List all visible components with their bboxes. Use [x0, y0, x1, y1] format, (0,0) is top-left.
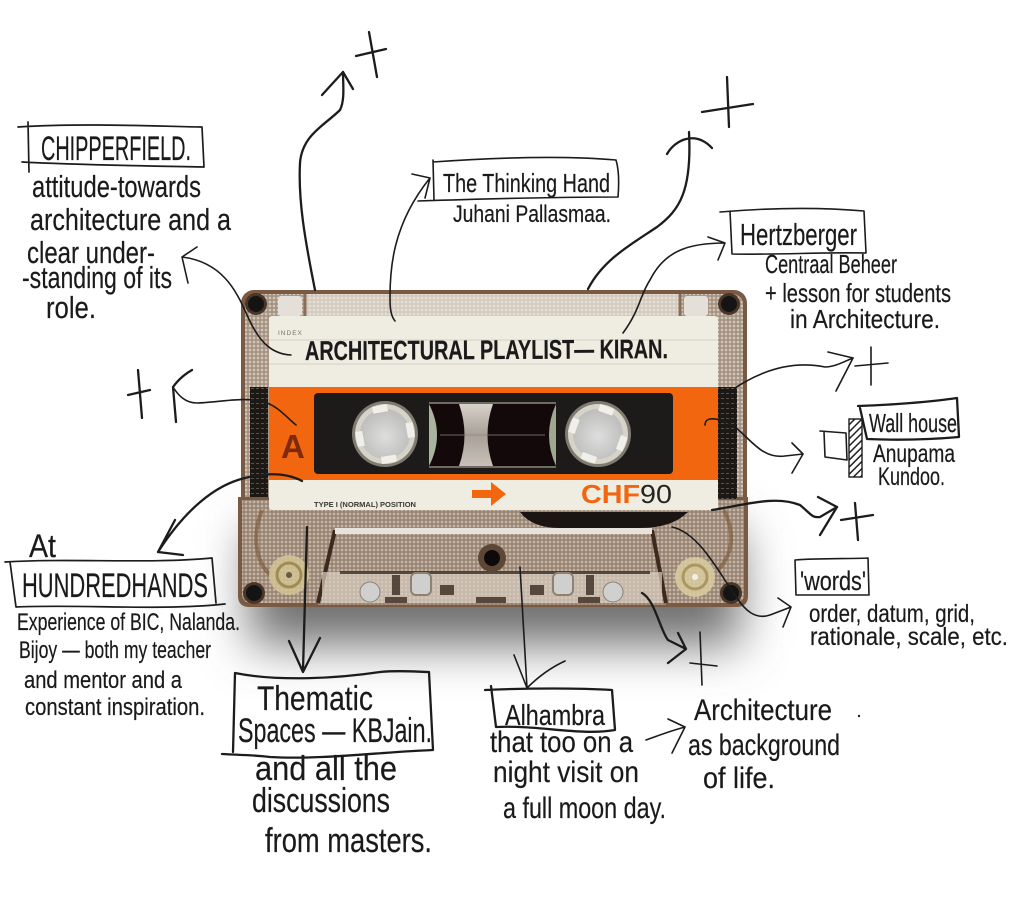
body text: and mentor and a [24, 667, 183, 694]
left reel [352, 401, 418, 467]
body text: role. [46, 290, 96, 325]
index label: INDEX [278, 330, 303, 337]
body text: and all the [255, 750, 397, 788]
note: Wall house [820, 398, 959, 491]
body text: order, datum, grid, [809, 600, 975, 628]
arrow and plus: bottom right [642, 593, 717, 685]
note: Thematic Spaces: Spaces — KBJain. [238, 712, 432, 750]
heading: CHIPPERFIELD. [41, 130, 191, 168]
body text: -standing of its [22, 260, 172, 295]
orange direction arrow [472, 482, 506, 506]
body text: Bijoy — both my teacher [19, 637, 211, 664]
body text: + lesson for students [765, 278, 951, 308]
body text: night visit on [493, 756, 639, 789]
wall section sketch [820, 419, 862, 477]
arrow: to Hundredhands [158, 474, 302, 555]
note: Architecture as background of life: Architecture [694, 694, 832, 727]
arrow: to wall house sketch [705, 419, 803, 473]
lower body section [238, 497, 748, 607]
arrow and plus: top right [588, 77, 753, 289]
CHF90 brand: CHF90 [581, 479, 672, 509]
orange band [269, 387, 718, 480]
arrow: to words [672, 527, 791, 627]
heading box [222, 671, 433, 758]
right dark grip strip [718, 387, 737, 499]
heading box [720, 208, 866, 254]
tape window [314, 393, 673, 474]
right roller [675, 557, 715, 597]
paper label [269, 316, 718, 510]
note: At Hundredhands [5, 528, 240, 721]
heading: Thematic [257, 680, 373, 718]
tape guide holes [360, 573, 623, 602]
note: Architecture as background of life: as background [688, 729, 840, 762]
body text: attitude-towards [32, 169, 201, 204]
heading box [858, 398, 959, 440]
heading: The Thinking Hand [443, 168, 610, 198]
top corner windows [278, 296, 708, 316]
arrow and plus: right lower [712, 497, 873, 540]
arrow: Alhambra to architecture [646, 719, 685, 753]
body text [765, 249, 951, 334]
plus with arrow: left [128, 370, 296, 425]
arrow: label to Hertzberger [623, 237, 725, 333]
arrow: to Alhambra [514, 567, 565, 688]
body text: architecture and a [30, 202, 232, 237]
architect name: Anupama [873, 440, 955, 468]
note: Thematic Spaces [222, 671, 433, 860]
note: Architecture as background of life [688, 694, 840, 795]
architect name: Kundoo. [878, 463, 945, 491]
note: The Thinking Hand [418, 157, 619, 228]
head opening trapezoid [318, 528, 666, 605]
body text: discussions [252, 782, 390, 820]
body text [252, 750, 432, 860]
heading box [5, 558, 225, 607]
body text: Experience of BIC, Nalanda. [17, 609, 240, 636]
arrow: label to Chipperfield [182, 247, 291, 355]
author: Juhani Pallasmaa. [453, 201, 611, 228]
stray dot [858, 715, 860, 717]
note: Alhambra [485, 686, 666, 825]
left roller [269, 555, 309, 595]
note: Architecture as background of life: of life. [703, 762, 775, 795]
note: Hertzberger [720, 208, 951, 334]
heading box [418, 157, 619, 201]
cassette shadow [250, 530, 740, 645]
heading: Hertzberger [740, 217, 857, 252]
heading: HUNDREDHANDS [22, 567, 208, 605]
side letter A: A [281, 428, 305, 465]
dark arc under label [520, 512, 688, 528]
heading: Alhambra [505, 700, 606, 732]
side wear arcs [256, 510, 731, 575]
arrow: label to The Thinking Hand [390, 174, 430, 321]
body text [17, 609, 240, 721]
corner screws [243, 293, 742, 604]
dark tape-path blocks [385, 575, 600, 603]
heading box [795, 558, 869, 595]
body text [22, 169, 232, 325]
body text: from masters. [265, 822, 432, 860]
heading: Wall house [869, 408, 957, 438]
note: words [795, 558, 1008, 651]
note: Chipperfield [18, 122, 232, 325]
body text: in Architecture. [790, 304, 940, 334]
cassette body [241, 290, 747, 607]
handwritten cassette title: ARCHITECTURAL PLAYLIST— KIRAN. [305, 334, 668, 366]
right reel [565, 401, 631, 467]
body text [490, 726, 666, 825]
arrow and plus: right upper [735, 347, 888, 391]
heading: 'words' [800, 566, 866, 596]
body text [809, 600, 1008, 651]
body text: Centraal Beheer [765, 249, 897, 279]
arrow: to Thematic Spaces [289, 527, 320, 672]
tape type text: TYPE I (NORMAL) POSITION [314, 500, 416, 509]
body text: a full moon day. [503, 792, 666, 825]
cassette tape [238, 290, 748, 607]
body text: constant inspiration. [25, 694, 205, 721]
heading box [485, 686, 615, 732]
centre hub [478, 544, 506, 572]
arrow and plus: top left [300, 32, 386, 290]
top translucent strip [305, 294, 680, 318]
centre viewing window [429, 402, 556, 468]
at: At [29, 528, 56, 564]
body text: clear under- [27, 235, 155, 270]
heading box [18, 122, 204, 172]
body text: that too on a [490, 726, 633, 759]
architect name [873, 440, 955, 491]
left dark grip strip [250, 387, 268, 497]
